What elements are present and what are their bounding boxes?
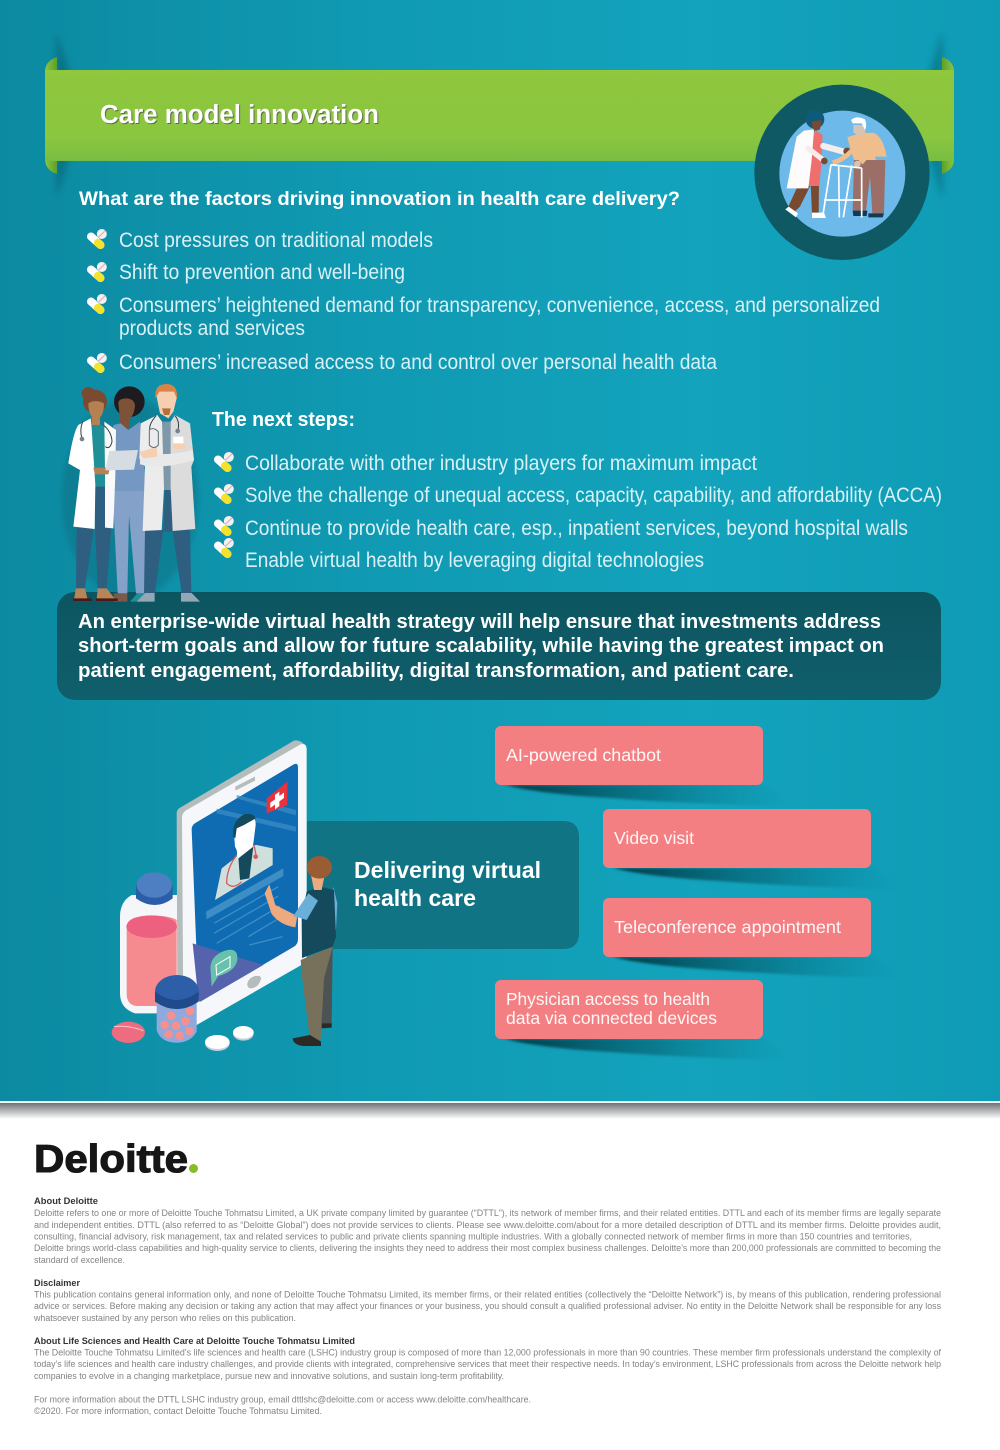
contact and copyright text [34,1394,531,1416]
Deloitte logo: Deloitte [34,1138,188,1181]
about Deloitte text: standard of excellence. [34,1255,125,1265]
illustration: virtual care tablet with medicine and user [112,740,337,1051]
left clinician [68,387,118,601]
card: teleconference appointment: Teleconference appointment [614,917,841,937]
callout: virtual health strategy [57,592,941,700]
next steps heading: The next steps: [212,409,355,431]
contact and copyright text: For more information about the DTTL LSHC industry group, email dttlshc@deloitte.com or access www.deloitte.com/healthcare. [34,1394,531,1404]
about Deloitte text: Deloitte refers to one or more of Deloitte Touche Tohmatsu Limited, a UK private company limited by guarantee (“DTTL”), its network of member firms, and their related entities. DTTL and each of its member firms are legally separate [34,1208,941,1218]
pill jar [155,975,199,1043]
tablet device [177,740,307,1026]
disclaimer text [33,1278,942,1323]
card: video visit: Video visit [614,828,694,848]
panel: delivering virtual health care: Delivering virtual [354,857,541,883]
about life sciences text [34,1336,942,1381]
contact and copyright text: ©2020. For more information, contact Deloitte Touche Tohmatsu Limited. [34,1406,322,1416]
list: next steps: Continue to provide health care, esp., inpatient services, beyond hospital walls [245,517,908,540]
tablet in hand [105,450,138,470]
callout: virtual health strategy: short-term goals and allow for future scalability, while having the greatest impact on [78,635,884,657]
about life sciences text: About Life Sciences and Health Care at Deloitte Touche Tohmatsu Limited [34,1336,355,1346]
about Deloitte text: and independent entities. DTTL (also referred to as “Deloitte Global”) does not provide services to clients. Please see www.deloitte.com/about for a more detailed description of DTTL and its member firms. Deloitte provides audit, [34,1220,941,1230]
title: Care model innovation [100,101,379,129]
question heading: What are the factors driving innovation in health care delivery? [79,188,680,210]
panel: delivering virtual health care: health care [354,885,476,911]
list: drivers of innovation: Shift to prevention and well-being [119,261,405,284]
teal background [0,0,1000,1102]
list: drivers of innovation: Cost pressures on traditional models [119,229,433,252]
right clinician [137,384,200,602]
medicine bottle [120,872,180,1013]
list: drivers of innovation: Consumers’ heightened demand for transparency, convenience, access, and personalized [119,294,880,317]
disclaimer text: Disclaimer [34,1278,81,1288]
card: physician access [495,980,790,1060]
list: next steps [218,452,942,572]
card: video visit [603,809,898,889]
callout: virtual health strategy: An enterprise-wide virtual health strategy will help ensure that investments address [78,611,881,633]
icon: caregiver and patient with walker [754,85,930,260]
banner ribbon [45,35,954,195]
list: next steps: Collaborate with other industry players for maximum impact [245,452,757,475]
card: teleconference appointment [603,898,898,978]
about life sciences text: The Deloitte Touche Tohmatsu Limited’s life sciences and health care (LSHC) industry group is composed of more than 12,000 professionals in more than 90 countries. These member firm professionals understand the complexity of [34,1348,942,1358]
about Deloitte text: consulting, financial advisory, risk management, tax and related services to public and private clients spanning multiple industries. With a globally connected network of member firms in more than 150 countries and territories, [34,1232,912,1242]
about life sciences text: companies to evolve in a changing marketplace, pursue new and innovative solutions, and sustain long-term profitability. [34,1371,504,1381]
footer white area [0,1102,1000,1450]
disclaimer text: This publication contains general information only, and none of Deloitte Touche Tohmatsu Limited, its member firms, or their related entities (collectively the “Deloitte Network”) is, by means of this publication, rendering professional [34,1290,941,1300]
card: physician access: Physician access to health [506,989,710,1009]
middle clinician [113,386,147,602]
panel: delivering virtual health care [307,821,579,949]
illustration: three clinicians [62,384,200,602]
card: AI-powered chatbot: AI-powered chatbot [506,745,661,765]
list: drivers of innovation: products and services [119,317,305,340]
callout: virtual health strategy: patient engagement, affordability, digital transformation, and patient care. [78,660,794,682]
list: next steps: Enable virtual health by leveraging digital technologies [245,549,704,572]
about life sciences text: today’s life sciences and health care industry challenges, and provide clients with integrated, comprehensive services that meet their respective needs. In today’s environment, LSHC professionals from across the Deloitte network help [34,1359,941,1369]
list: drivers of innovation: Consumers’ increased access to and control over personal health data [119,351,717,374]
card: AI-powered chatbot [495,726,790,806]
list: drivers of innovation [91,229,880,374]
disclaimer text: advice or services. Before making any decision or taking any action that may affect your finances or your business, you should consult a qualified professional adviser. No entity in the Deloitte Network shall be responsible for any loss [34,1301,942,1311]
card: physician access: data via connected devices [506,1008,717,1028]
about Deloitte text: About Deloitte [34,1196,98,1206]
about Deloitte text [34,1196,941,1265]
loose pills [112,1022,254,1051]
person touching screen [265,856,337,1046]
disclaimer text: whatsoever sustained by any person who relies on this publication. [33,1313,296,1323]
about Deloitte text: Deloitte brings world-class capabilities and high-quality service to clients, delivering the insights they need to address their most complex business challenges. Deloitte’s more than 200,000 professionals are committed to becoming the [34,1243,941,1253]
